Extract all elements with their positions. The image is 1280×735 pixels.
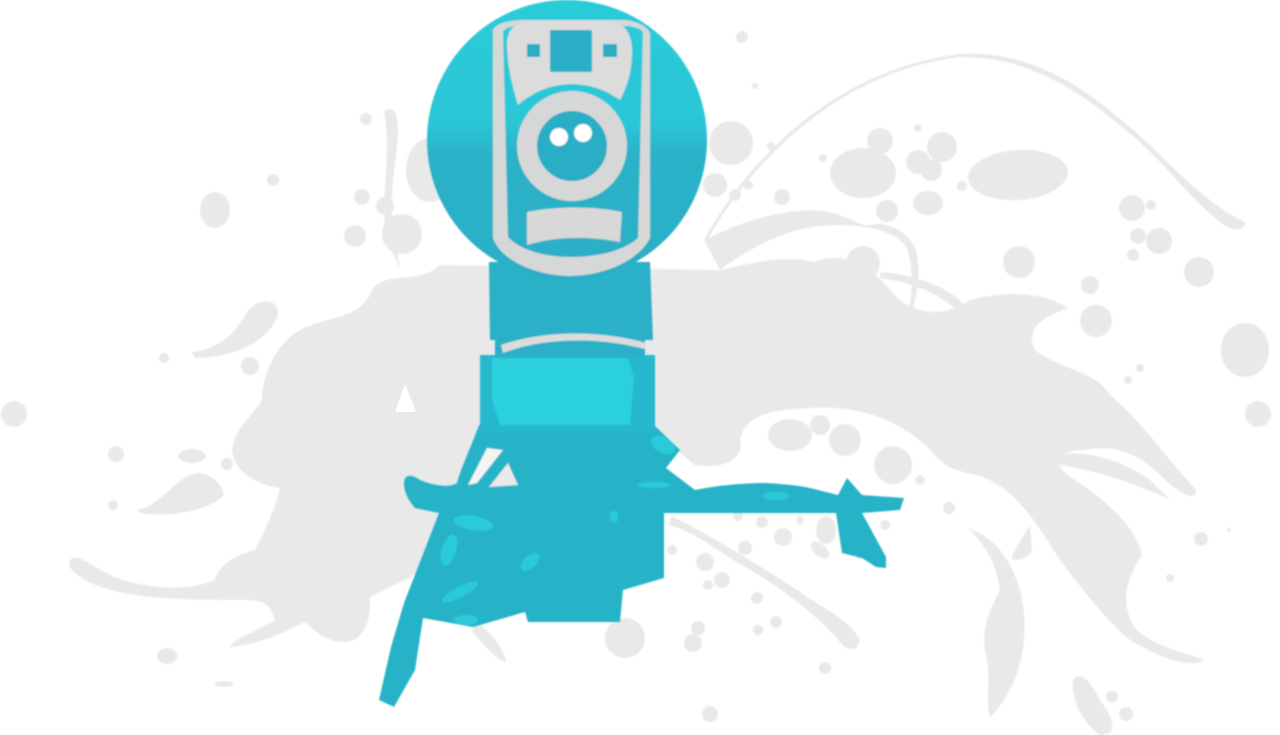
main splat body: [69, 258, 1204, 663]
swooping thin curves: [704, 54, 1245, 240]
cable triangle highlight: [489, 463, 518, 487]
camera housing frame: [493, 20, 650, 276]
splatter droplets: [200, 192, 230, 228]
neck band: [501, 333, 646, 353]
camera lower plate: [527, 208, 622, 245]
neck: [489, 262, 653, 340]
camera top plate: [507, 21, 632, 105]
camera figure: [379, 0, 904, 707]
lower teal body with arms: [379, 425, 904, 707]
upper collar: [480, 355, 655, 433]
collar bright panel: [492, 358, 634, 425]
lens outer ring: [527, 101, 617, 191]
lens highlight right: [574, 124, 592, 142]
viewfinder square: [550, 30, 592, 72]
small white gap in splatter: [395, 384, 416, 412]
spherical head: [427, 0, 707, 280]
small left button: [527, 44, 540, 57]
small right button: [603, 44, 617, 57]
cable slot highlight: [468, 448, 503, 485]
body highlights: [437, 432, 790, 625]
lens highlight left: [550, 128, 568, 146]
